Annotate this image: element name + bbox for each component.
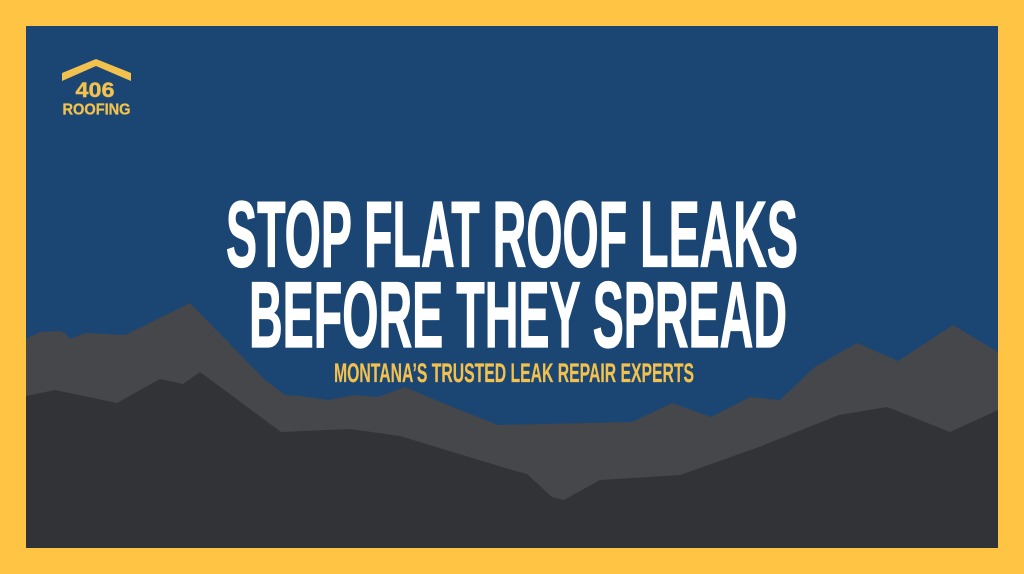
logo wordmark: ROOFING: [62, 102, 130, 118]
logo: 406 Roofing: [62, 59, 131, 118]
subtitle: MONTANA’S TRUSTED LEAK REPAIR EXPERTS: [334, 358, 694, 388]
back mountain range: [26, 303, 998, 548]
front mountain range: [26, 372, 998, 548]
icon: roof: [62, 59, 131, 81]
logo number: 406: [76, 78, 115, 102]
title: [226, 182, 798, 367]
